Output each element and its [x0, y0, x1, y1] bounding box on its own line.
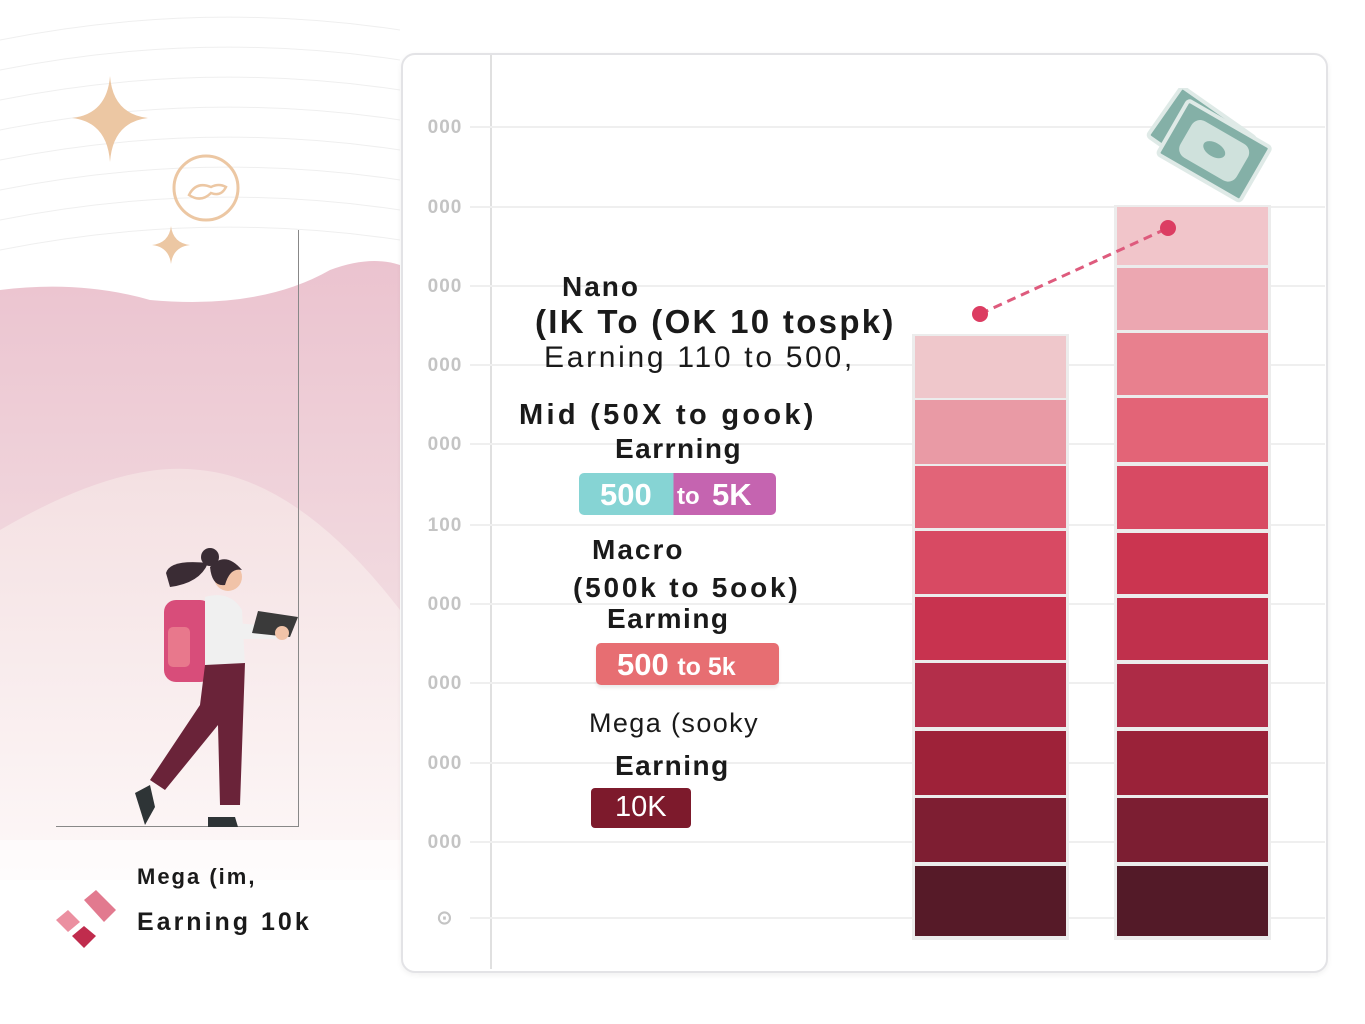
text: 000 [428, 753, 462, 774]
grid lines [470, 126, 1325, 919]
text: Mega [589, 708, 759, 781]
bar: right [1114, 205, 1271, 940]
icon: sparkle large [72, 76, 148, 162]
text: Macro [592, 534, 684, 565]
text: Mid (50X to gook) [519, 399, 817, 431]
icon: circle emblem [172, 154, 240, 222]
y axis labels [428, 117, 462, 929]
trend line dots [972, 220, 1176, 322]
pill: 500 to 5K: 5K [712, 477, 752, 512]
text: Earming [607, 603, 730, 634]
text: 000 [428, 355, 462, 376]
text: 000 [428, 594, 462, 615]
pill: 10K [591, 788, 691, 828]
text: 000 [428, 832, 462, 853]
text: 000 [428, 117, 462, 138]
text: 000 [428, 434, 462, 455]
text: 000 [428, 276, 462, 297]
text: Earning [615, 750, 730, 781]
text: (IK To (OK 10 tospk) [535, 303, 896, 340]
text: Mega (sooky [589, 708, 759, 738]
text: Mid [519, 399, 817, 464]
icon: sparkle small [152, 226, 190, 264]
pill: 500 to 5K: 500 [600, 477, 652, 512]
text: 000 [428, 197, 462, 218]
pill: 500 to 5K: to [677, 483, 700, 510]
bar: left [912, 334, 1069, 940]
left background illustration [0, 16, 400, 840]
icon: logo [56, 890, 116, 948]
text: Macro [573, 534, 800, 634]
text: Nano [562, 271, 640, 302]
text: 100 [428, 515, 462, 536]
pill: 500 to 5k [596, 643, 779, 685]
text: ⊙ [437, 908, 453, 929]
pill: 10K: 10K [615, 791, 667, 823]
illustration: walking girl [135, 548, 298, 827]
text: Earrning [615, 433, 742, 464]
vertical frame line [298, 230, 299, 827]
text: Nano [535, 271, 896, 374]
pill: 500 to 5k: 500 to 5k [617, 647, 736, 682]
text: (500k to 5ook) [573, 572, 800, 603]
text: left caption: Mega (im, [137, 864, 256, 889]
icon: money bills [1146, 88, 1272, 202]
pill: 500 to 5K [579, 473, 776, 515]
panel: chart [401, 53, 1328, 973]
text: Earning 10k [137, 908, 312, 936]
text: Earning 110 to 500, [544, 341, 855, 374]
text: 000 [428, 673, 462, 694]
